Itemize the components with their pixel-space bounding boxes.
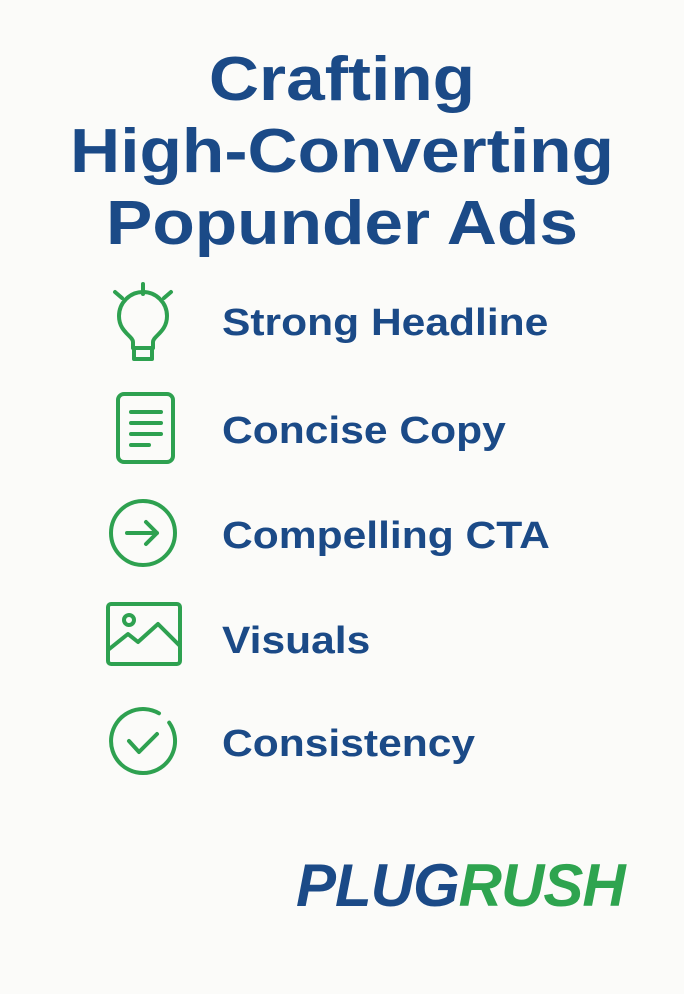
item: visuals (106, 602, 370, 666)
logo: PLUGRUSH (296, 852, 625, 919)
item: compelling CTA (109, 499, 550, 567)
title (70, 45, 614, 258)
item: visuals: Visuals (222, 620, 370, 662)
icon: light bulb (112, 282, 174, 361)
title: High-Converting (70, 117, 614, 186)
item: strong headline: Strong Headline (222, 302, 548, 344)
title: Crafting (209, 45, 475, 114)
icon: document (116, 392, 175, 464)
icon: image (106, 602, 182, 666)
title: Popunder Ads (106, 189, 578, 258)
icon: check circle (109, 707, 178, 775)
item: concise copy (116, 392, 506, 464)
item: consistency: Consistency (222, 723, 475, 765)
item: strong headline (112, 282, 548, 361)
item: concise copy: Concise Copy (222, 410, 506, 452)
icon: arrow circle (109, 499, 177, 567)
item: consistency (109, 707, 475, 775)
item: compelling CTA: Compelling CTA (222, 515, 550, 557)
